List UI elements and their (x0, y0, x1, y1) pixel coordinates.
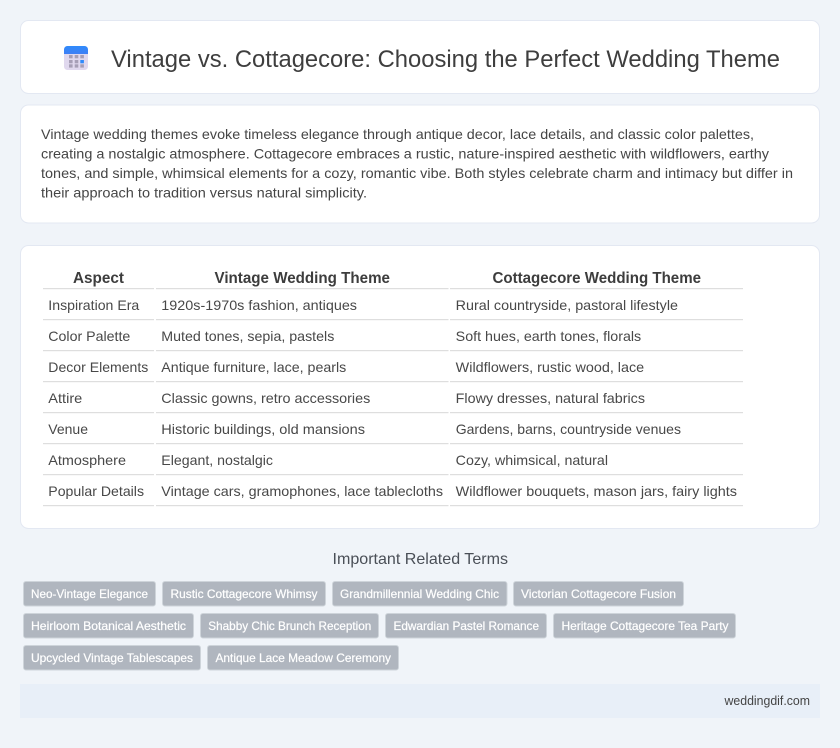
table row: Inspiration Era: Inspiration Era (48, 297, 140, 313)
related term tags: Grandmillennial Wedding Chic (340, 587, 499, 601)
table row: Atmosphere: Atmosphere (48, 452, 126, 468)
table row: Decor Elements (43, 359, 743, 382)
related term tags: Rustic Cottagecore Whimsy (170, 587, 318, 601)
table row: Attire: Attire (48, 390, 83, 406)
related term tags: Upcycled Vintage Tablescapes (31, 651, 193, 665)
table row: Color Palette: Soft hues, earth tones, florals (456, 328, 641, 344)
panel: introduction paragraph: their approach to tradition versus natural simplicity. (41, 184, 367, 200)
related term tags (24, 582, 736, 670)
panel: introduction paragraph (20, 105, 820, 223)
table row: Inspiration Era: 1920s-1970s fashion, antiques (161, 297, 357, 313)
table row: Atmosphere: Elegant, nostalgic (161, 452, 273, 468)
related term tags: Neo-Vintage Elegance (31, 587, 148, 601)
panel: introduction paragraph: tones, and simple, whimsical elements for a cozy, romantic vibe. Both styles celebrate charm and intimacy but differ in (41, 165, 793, 181)
table row: Inspiration Era: Rural countryside, pastoral lifestyle (456, 297, 678, 313)
panel: introduction paragraph: Vintage wedding themes evoke timeless elegance through antique decor, lace details, and classic color palettes, (41, 126, 754, 142)
table header row: Aspect (73, 270, 125, 287)
table row: Atmosphere: Cozy, whimsical, natural (456, 452, 608, 468)
table row: Color Palette: Color Palette (48, 328, 131, 344)
table row: Venue: Venue (48, 421, 88, 437)
table header row: Vintage Wedding Theme (214, 270, 390, 287)
table row: Popular Details: Popular Details (48, 483, 144, 499)
table row: Decor Elements: Antique furniture, lace, pearls (161, 359, 346, 375)
related term tags: Victorian Cottagecore Fusion (521, 587, 676, 601)
table row: Attire (43, 390, 743, 413)
heading: important related terms: Important Related Terms (332, 551, 508, 568)
table row: Venue (43, 421, 743, 444)
panel: comparison table (20, 246, 820, 528)
related term tags: Edwardian Pastel Romance (394, 619, 539, 633)
related term tags: Shabby Chic Brunch Reception (208, 619, 371, 633)
table row: Decor Elements: Wildflowers, rustic wood, lace (456, 359, 644, 375)
table row: Inspiration Era (43, 297, 743, 320)
related term tags: Antique Lace Meadow Ceremony (216, 651, 391, 665)
table row: Popular Details: Wildflower bouquets, mason jars, fairy lights (456, 483, 737, 499)
panel: title header (20, 20, 820, 94)
table row: Popular Details: Vintage cars, gramophones, lace tablecloths (161, 483, 443, 499)
panel: introduction paragraph: creating a nostalgic atmosphere. Cottagecore embraces a rustic, nature-inspired aesthetic with wildflowers, earthy (41, 146, 769, 162)
table row: Attire: Classic gowns, retro accessories (161, 390, 370, 406)
table row: Popular Details (43, 483, 743, 506)
table header row: Cottagecore Wedding Theme (492, 270, 701, 287)
table row: Color Palette (43, 328, 743, 351)
related term tags: Heritage Cottagecore Tea Party (562, 619, 728, 633)
table row: Attire: Flowy dresses, natural fabrics (456, 390, 645, 406)
table row: Atmosphere (43, 452, 743, 475)
footer source text: weddingdif.com (724, 693, 810, 708)
table row: Decor Elements: Decor Elements (48, 359, 148, 375)
table row: Venue: Historic buildings, old mansions (161, 421, 365, 437)
table row: Venue: Gardens, barns, countryside venues (456, 421, 681, 437)
related term tags: Heirloom Botanical Aesthetic (31, 619, 186, 633)
footer bar (20, 684, 820, 718)
table row: Color Palette: Muted tones, sepia, pastels (161, 328, 334, 344)
table header row (43, 270, 743, 289)
icon: calendar (64, 46, 88, 70)
title: Vintage vs. Cottagecore: Choosing the Perfect Wedding Theme (111, 46, 780, 73)
